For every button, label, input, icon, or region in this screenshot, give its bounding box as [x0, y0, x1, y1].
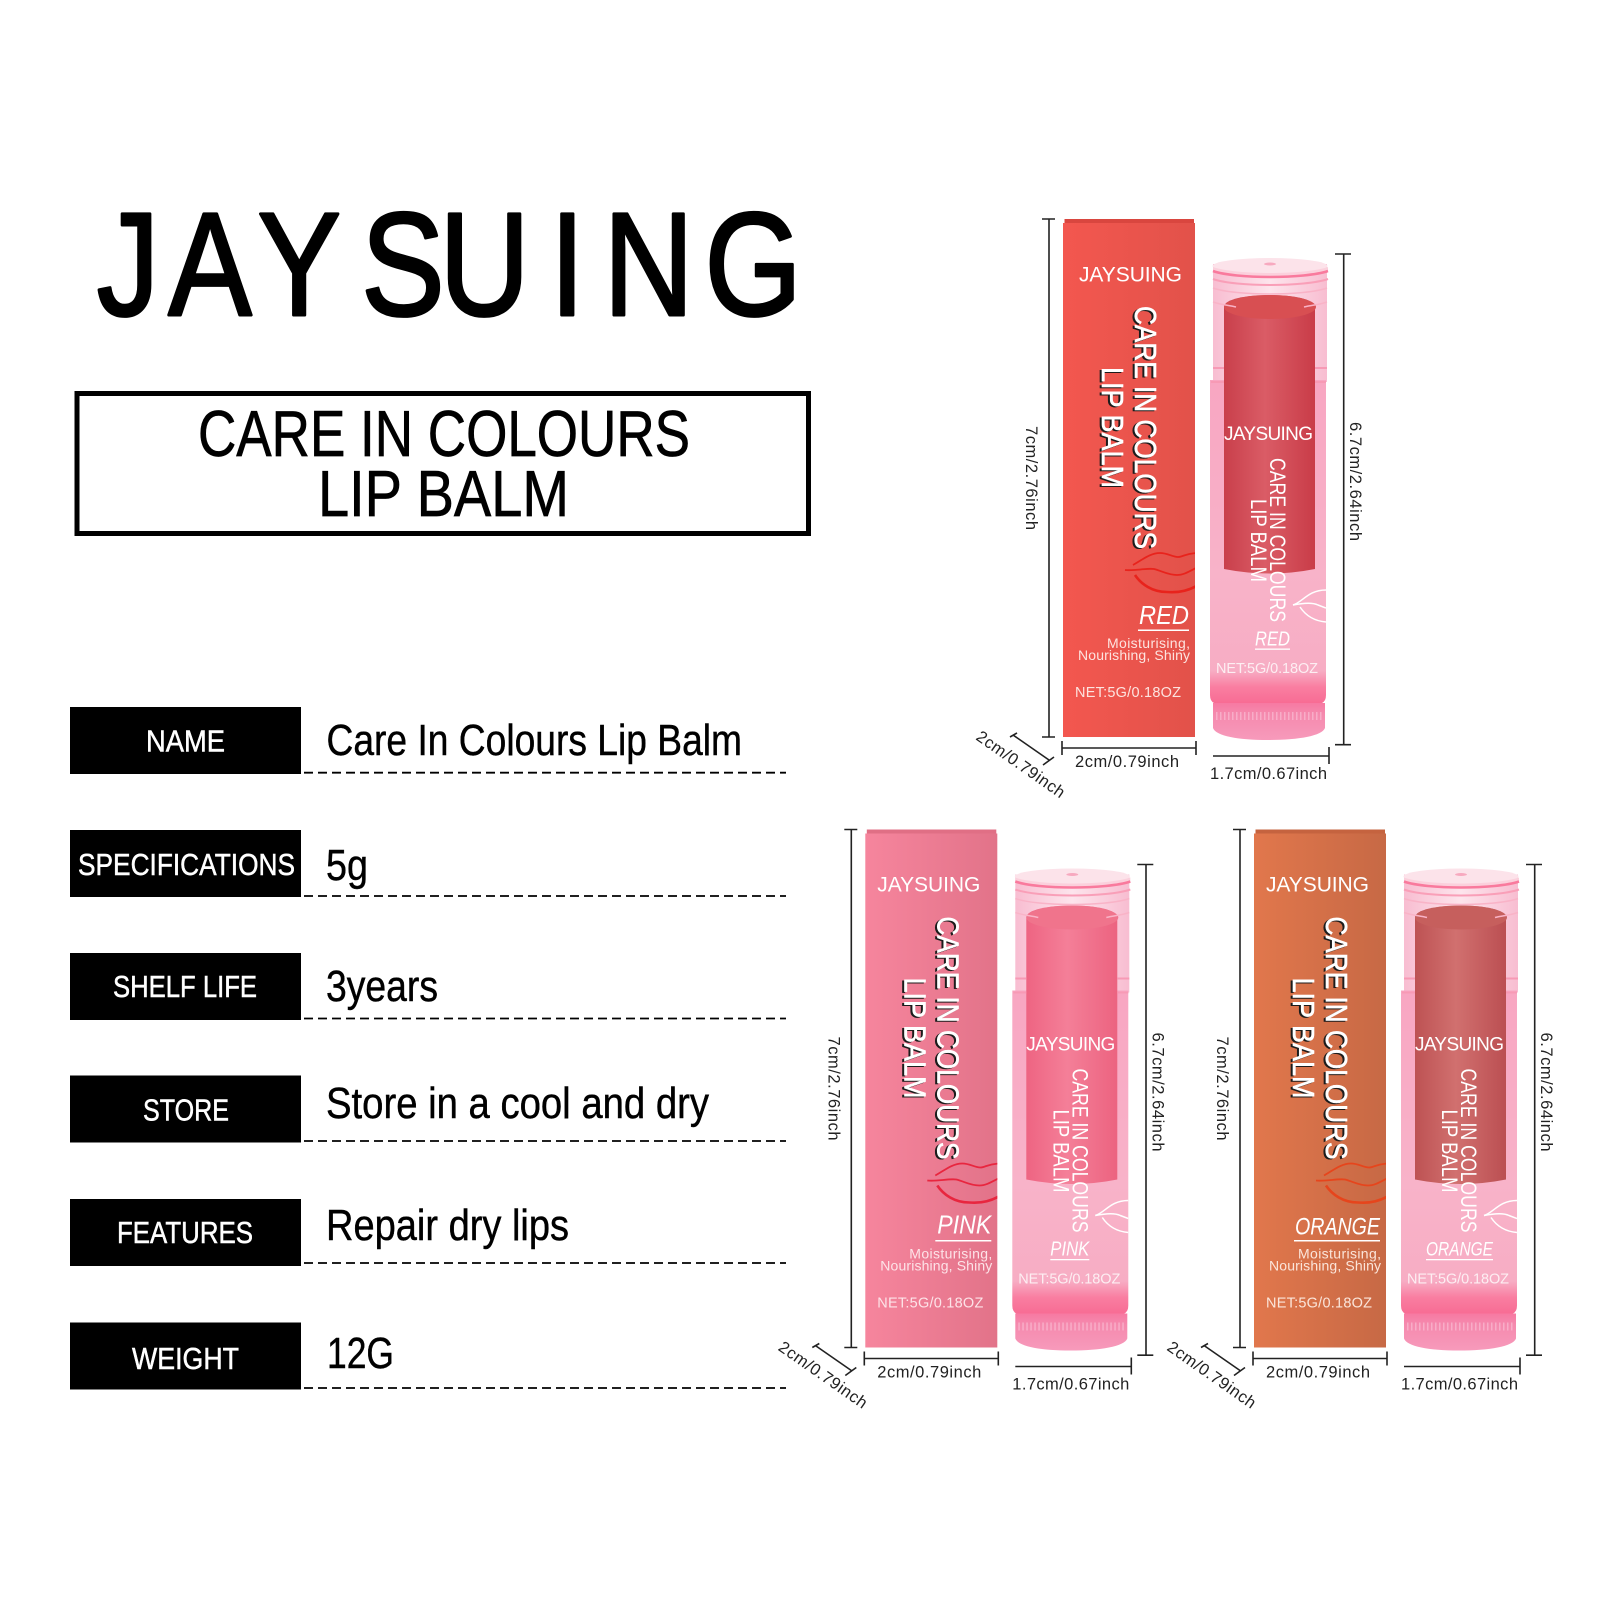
spec row: weight: WEIGHT — [132, 1341, 239, 1376]
red dimensions: 2cm/0.79inch — [1075, 753, 1179, 771]
orange dimensions: 7cm/2.76inch — [1213, 1036, 1231, 1140]
product title box — [77, 394, 808, 534]
pink box: JAYSUING — [877, 874, 980, 896]
spec row: features: Repair dry lips — [326, 1201, 569, 1250]
spec row: name — [70, 707, 786, 774]
spec row: store: Store in a cool and dry — [326, 1079, 709, 1128]
pink lip balm stick: LIP BALM — [1048, 1110, 1073, 1192]
red lip balm stick — [1210, 258, 1328, 740]
spec row: specifications: SPECIFICATIONS — [78, 847, 295, 882]
spec row: name: NAME — [146, 724, 225, 758]
pink box: Nourishing, Shiny — [880, 1258, 992, 1274]
spec row: store: STORE — [143, 1092, 229, 1128]
red dimensions: 6.7cm/2.64inch — [1346, 422, 1364, 541]
red box: LIP BALM — [1095, 367, 1130, 488]
spec row: shelf life: 3years — [326, 962, 438, 1011]
red dimensions: 2cm/0.79inch — [973, 728, 1068, 802]
orange dimensions: 2cm/0.79inch — [1266, 1364, 1370, 1382]
pink box: Moisturising, — [909, 1246, 992, 1262]
orange box: JAYSUING — [1266, 874, 1369, 896]
pink dimensions: 2cm/0.79inch — [877, 1364, 981, 1382]
pink lip balm stick: JAYSUING — [1026, 1034, 1115, 1056]
red lip balm stick: CARE IN COLOURS — [1265, 458, 1290, 622]
orange lip balm stick: NET:5G/0.18OZ — [1407, 1272, 1509, 1288]
red dimensions — [973, 219, 1364, 802]
red box: Moisturising, — [1107, 635, 1190, 651]
orange lip balm stick: LIP BALM — [1437, 1110, 1462, 1192]
spec row: weight — [70, 1322, 786, 1390]
orange box: Moisturising, — [1298, 1246, 1381, 1262]
red box: Nourishing, Shiny — [1078, 647, 1190, 663]
pink box: NET:5G/0.18OZ — [877, 1296, 983, 1312]
spec row: specifications: 5g — [326, 841, 368, 890]
pink box: PINK — [937, 1210, 993, 1240]
pink dimensions: 7cm/2.76inch — [824, 1036, 842, 1140]
orange dimensions: 2cm/0.79inch — [1164, 1338, 1259, 1412]
pink dimensions — [775, 830, 1166, 1412]
red box: CARE IN COLOURS — [1128, 306, 1163, 549]
red lip balm stick: LIP BALM — [1246, 499, 1271, 582]
orange box: LIP BALM — [1286, 978, 1321, 1098]
spec row: features — [70, 1199, 786, 1266]
orange box: Nourishing, Shiny — [1269, 1258, 1381, 1274]
spec row: weight: 12G — [327, 1329, 394, 1378]
orange dimensions — [1164, 830, 1555, 1412]
orange box: NET:5G/0.18OZ — [1266, 1296, 1372, 1312]
pink lip balm stick — [1012, 868, 1130, 1350]
red lip balm stick: NET:5G/0.18OZ — [1216, 661, 1318, 677]
pink dimensions: 6.7cm/2.64inch — [1148, 1032, 1166, 1152]
pink box: LIP BALM — [897, 978, 932, 1098]
red dimensions: 1.7cm/0.67inch — [1210, 765, 1327, 783]
red lip balm stick: JAYSUING — [1224, 424, 1313, 445]
product group: red — [973, 219, 1364, 802]
red lip balm stick: RED — [1255, 628, 1290, 650]
brand logo: JAYSUING — [97, 182, 802, 346]
red dimensions: 7cm/2.76inch — [1022, 426, 1040, 530]
pink lip balm stick: CARE IN COLOURS — [1067, 1068, 1092, 1232]
orange box — [1254, 830, 1389, 1348]
spec row: name: Care In Colours Lip Balm — [326, 716, 742, 765]
product group: pink — [775, 830, 1166, 1412]
pink box — [865, 830, 1000, 1348]
red box: JAYSUING — [1079, 264, 1182, 286]
spec row: shelf life: SHELF LIFE — [113, 969, 257, 1004]
product title box: LIP BALM — [318, 457, 569, 530]
orange lip balm stick: JAYSUING — [1415, 1034, 1504, 1056]
product title box: CARE IN COLOURS — [198, 397, 690, 470]
orange lip balm stick: ORANGE — [1426, 1240, 1493, 1260]
spec row: shelf life — [70, 953, 786, 1020]
pink box: CARE IN COLOURS — [930, 916, 965, 1160]
orange box: CARE IN COLOURS — [1319, 916, 1354, 1160]
orange dimensions: 1.7cm/0.67inch — [1401, 1376, 1518, 1394]
red box: RED — [1139, 600, 1189, 630]
pink lip balm stick: PINK — [1050, 1238, 1091, 1260]
pink dimensions: 2cm/0.79inch — [775, 1338, 871, 1412]
orange lip balm stick: CARE IN COLOURS — [1456, 1068, 1481, 1232]
orange box: ORANGE — [1295, 1214, 1381, 1240]
red box — [1063, 219, 1198, 737]
orange lip balm stick — [1401, 868, 1519, 1350]
product group: orange — [1164, 830, 1555, 1412]
pink lip balm stick: NET:5G/0.18OZ — [1018, 1272, 1120, 1288]
orange dimensions: 6.7cm/2.64inch — [1537, 1032, 1555, 1152]
spec row: features: FEATURES — [117, 1215, 253, 1250]
red box: NET:5G/0.18OZ — [1075, 685, 1181, 701]
spec row: store — [70, 1076, 786, 1142]
pink dimensions: 1.7cm/0.67inch — [1012, 1376, 1129, 1394]
spec row: specifications — [70, 830, 786, 897]
